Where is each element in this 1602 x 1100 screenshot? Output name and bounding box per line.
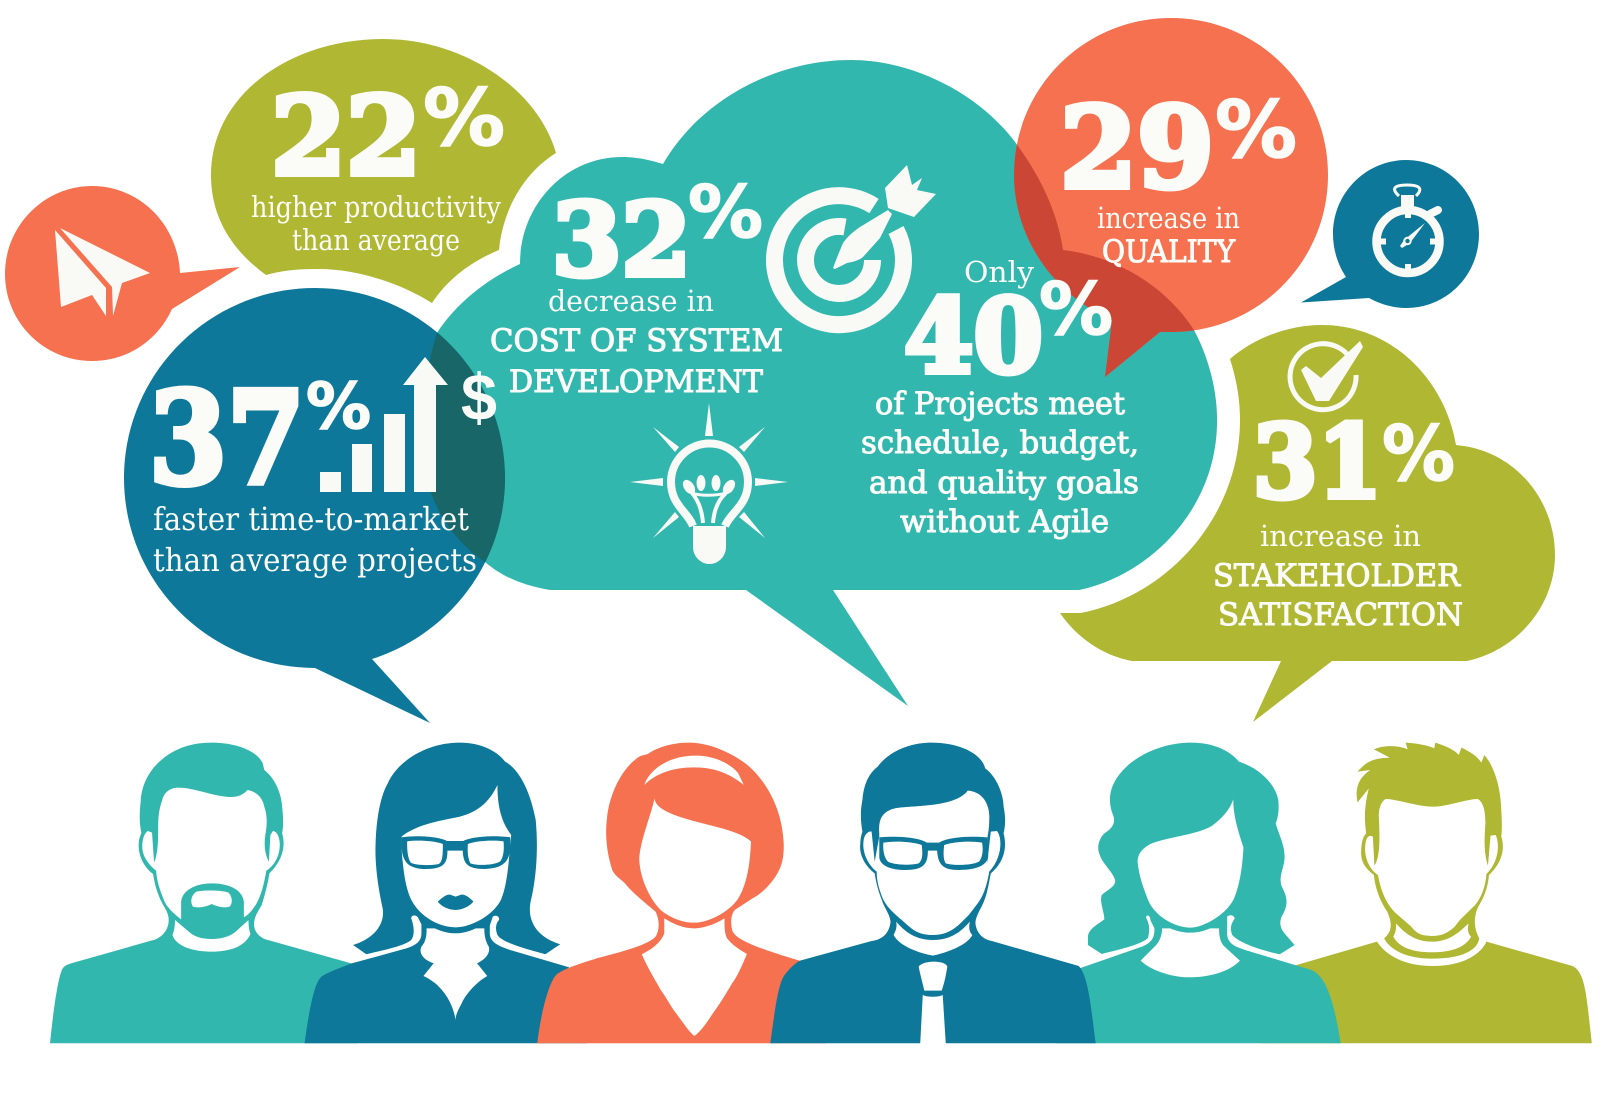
- stat: 40%: 40: [904, 277, 1043, 397]
- icon: check mark in ring: [1290, 341, 1363, 410]
- person: man with spiky hair, olive: [1260, 743, 1592, 1043]
- person: woman with glasses, blue: [305, 743, 587, 1043]
- text: increase in stakeholder satisfaction: [1213, 519, 1463, 633]
- stat: 22%: 22: [271, 74, 421, 200]
- text: decrease in cost of system development: decrease in: [548, 284, 714, 318]
- panel: 31% stakeholder satisfaction: [1060, 325, 1555, 722]
- text: higher productivity: [251, 190, 502, 257]
- stat: 32%: 32: [552, 181, 691, 299]
- text: increase in quality: QUALITY: [1102, 234, 1235, 270]
- stat: 37%: %: [306, 370, 371, 443]
- overlap: blue and teal: [430, 332, 505, 562]
- panel: 29% quality bubble: [1014, 18, 1328, 377]
- panel: 22% productivity: [211, 39, 556, 303]
- person: bearded man, teal: [50, 743, 357, 1043]
- text: higher productivity: than average: [292, 223, 460, 257]
- stat: 31%: %: [1382, 409, 1455, 498]
- stat: 40%: [904, 267, 1113, 397]
- text: increase in quality: increase in: [1097, 201, 1240, 235]
- text: of projects meet goals: of Projects meet: [875, 386, 1126, 422]
- overlap: orange and teal: [1014, 144, 1194, 377]
- stat: 31%: 31: [1253, 403, 1382, 521]
- person: man with glasses and tie, blue: [770, 743, 1096, 1044]
- text: higher productivity: higher productivity: [251, 190, 502, 224]
- text: faster time-to-market: than average projects: [153, 541, 477, 579]
- panel: stopwatch bubble: [1301, 160, 1479, 308]
- text: only: Only: [964, 255, 1035, 289]
- panel: 37% time-to-market bubble: [124, 288, 505, 723]
- text: of projects meet goals: and quality goals: [869, 465, 1139, 501]
- text: faster time-to-market: [153, 500, 477, 579]
- text: decrease in cost of system development: COST OF SYSTEM: [490, 323, 783, 359]
- stat: 29%: %: [1215, 86, 1297, 176]
- icon: paper plane: [55, 228, 150, 316]
- text: faster time-to-market: faster time-to-market: [153, 500, 469, 538]
- stat: 22%: [271, 74, 505, 200]
- text: of projects meet goals: [861, 386, 1139, 540]
- orange bubble shape: [5, 186, 240, 361]
- blue bubble shape: [1301, 160, 1479, 308]
- text: increase in stakeholder satisfaction: increase in: [1260, 519, 1421, 553]
- panel: 32% and 40% main teal speech bubble: [422, 60, 1217, 706]
- stat: 22%: %: [423, 74, 505, 164]
- olive bubble shape: [211, 39, 556, 303]
- stat: 32%: %: [688, 170, 763, 254]
- text: decrease in cost of system development: DEVELOPMENT: [509, 364, 763, 400]
- person: woman with headband, orange: [537, 743, 827, 1043]
- icon: target with dart: [774, 165, 936, 325]
- text: of projects meet goals: schedule, budget,: [861, 425, 1139, 461]
- stat: 32%: [552, 170, 763, 299]
- text: increase in stakeholder satisfaction: STAKEHOLDER: [1213, 558, 1462, 594]
- person: woman with wavy hair, teal: [1056, 743, 1341, 1043]
- icon: light bulb: [630, 403, 788, 564]
- icon: stopwatch: [1376, 185, 1440, 273]
- icon: rising bars and arrow: [320, 357, 448, 492]
- panel: plane bubble: [5, 186, 240, 361]
- icon: dollar sign: $: [461, 360, 497, 434]
- text: increase in quality: [1097, 201, 1240, 270]
- stat: 29%: [1060, 84, 1297, 214]
- text: increase in stakeholder satisfaction: SATISFACTION: [1218, 597, 1463, 633]
- stat: 37%: 37: [149, 364, 305, 513]
- text: decrease in cost of system development: [490, 284, 783, 400]
- stat: 40%: %: [1039, 267, 1113, 351]
- stat: 31%: [1253, 403, 1455, 521]
- text: of projects meet goals: without Agile: [900, 504, 1109, 540]
- stat: 29%: 29: [1060, 84, 1214, 214]
- olive bubble shape: [1060, 325, 1555, 722]
